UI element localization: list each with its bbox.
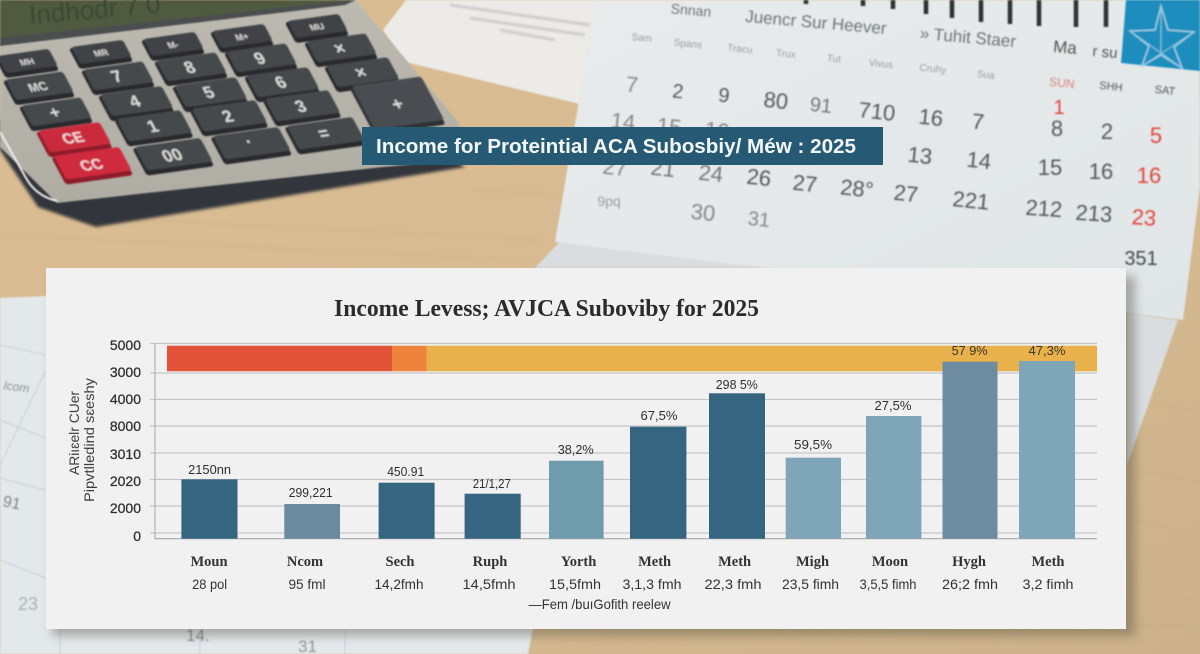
category sub-labels	[192, 576, 1074, 592]
calculator keys: 3	[291, 96, 310, 116]
calendar dates: 14	[610, 108, 637, 135]
category sub-labels: 3,1,3 fmh	[622, 576, 682, 592]
calendar weekday labels: Tut	[826, 53, 842, 66]
lower-left calendar sheet: 14.	[186, 626, 210, 645]
category labels: Sech	[386, 554, 414, 570]
calendar dates: 16	[1089, 159, 1113, 184]
calculator keys: M-	[165, 40, 181, 50]
bar value labels: 450.91	[387, 464, 424, 479]
calculator	[0, 0, 465, 227]
calculator keys: 00	[158, 145, 187, 166]
calendar header text: » Tuhit Staer	[919, 24, 1017, 51]
calendar dates: 2	[671, 80, 685, 104]
calendar dates: 7	[971, 108, 985, 135]
category labels: Meth	[1031, 554, 1065, 570]
calculator keys: MH	[18, 57, 37, 68]
y-axis labels: 2020	[110, 473, 141, 489]
bar value labels: 21/1,27	[473, 476, 511, 491]
category sub-labels: 14,5fmh	[462, 576, 516, 592]
y-axis labels: 8000	[110, 418, 141, 434]
calendar dates: 13	[906, 142, 933, 169]
calendar header text: Snnan	[670, 0, 712, 20]
calendar dates: 26	[745, 164, 772, 191]
calculator keys: 9	[250, 48, 269, 68]
calendar header text	[670, 0, 1118, 62]
calendar weekday labels	[631, 32, 1176, 98]
calendar dates: 16	[917, 104, 944, 131]
calendar header text: Juencr Sur Heever	[745, 7, 888, 38]
calendar weekday labels: SUN	[1049, 75, 1075, 91]
y-axis labels: 3000	[110, 364, 141, 380]
calculator keys: MU	[308, 22, 327, 33]
calculator keys: MR	[92, 48, 111, 59]
calculator keys: CE	[59, 129, 88, 148]
category labels: Ncom	[287, 554, 323, 570]
bars	[181, 361, 1075, 539]
calculator keys: ·	[241, 132, 256, 151]
calendar dates: 15	[656, 113, 683, 140]
calendar dates: 7	[625, 71, 639, 98]
bar value labels: 59,5%	[794, 437, 832, 452]
category labels: Yorth	[561, 554, 596, 570]
bar value labels: 299,221	[289, 485, 333, 500]
calendar	[555, 0, 1200, 320]
calendar dates: 23	[1131, 204, 1157, 231]
category labels: Moon	[872, 554, 908, 570]
calendar dates: 221	[951, 186, 991, 215]
category sub-labels: 26;2 fmh	[942, 576, 998, 592]
calendar weekday labels: Sua	[976, 69, 996, 82]
y-axis labels: 0	[133, 528, 141, 544]
category labels	[190, 554, 1065, 570]
calculator keys: 4	[125, 91, 144, 111]
calculator keys: =	[314, 123, 333, 143]
lower calendar sheet	[535, 236, 1178, 465]
calendar dates: 21	[649, 155, 676, 182]
calculator keys: CC	[77, 156, 107, 175]
calculator keys: M+	[233, 32, 251, 43]
calculator body	[0, 0, 464, 203]
panel drop shadow	[52, 276, 1135, 636]
calendar dates: 15	[1038, 155, 1062, 180]
calendar dates: 31	[747, 208, 771, 232]
calendar dates: 80	[762, 87, 789, 114]
calculator keys	[0, 14, 447, 185]
y-axis labels: 2000	[110, 500, 141, 516]
y-axis labels: 3010	[110, 446, 141, 462]
calendar dates: 5	[1150, 123, 1162, 148]
bar value labels: 38,2%	[558, 442, 594, 457]
category sub-labels: 28 pol	[192, 576, 227, 592]
category labels: Meth	[718, 554, 751, 570]
y-axis labels: 4000	[110, 391, 141, 407]
title banner	[362, 127, 883, 165]
calendar weekday labels: SAT	[1154, 84, 1176, 98]
category sub-labels: 23,5 fimh	[782, 576, 839, 592]
lower-left calendar sheet	[0, 296, 600, 654]
calendar header text: Ma	[1052, 37, 1078, 58]
calendar weekday labels: Trux	[776, 48, 796, 61]
calendar dates: 27	[791, 170, 818, 197]
category labels: Hygh	[952, 554, 986, 570]
category sub-labels: 95 fml	[288, 576, 326, 592]
category sub-labels: 3,5,5 fimh	[860, 576, 916, 592]
calendar weekday labels: Tracu	[727, 43, 753, 56]
calculator keys: ×	[351, 62, 370, 82]
calculator keys: MC	[25, 79, 51, 95]
calendar dates: 351	[1124, 248, 1158, 270]
category labels: Migh	[796, 554, 829, 570]
calendar weekday labels: Cruhy	[919, 63, 947, 76]
threshold colour band	[167, 346, 1097, 371]
chart panel	[46, 268, 1126, 629]
calculator keys: 1	[143, 116, 162, 136]
lower-left calendar sheet: Icom	[3, 378, 30, 396]
calculator base shadow	[0, 120, 465, 227]
calculator keys: ×	[330, 38, 349, 58]
calendar dates: 27	[892, 180, 919, 207]
gridlines	[150, 343, 1097, 539]
calendar dates: 16	[703, 117, 730, 144]
calendar dates: 9pq	[597, 193, 621, 209]
calendar weekday labels: Sam	[631, 32, 653, 45]
calculator display	[0, 0, 356, 46]
category sub-labels: 3,2 fimh	[1022, 576, 1074, 592]
calendar dates: 30	[690, 199, 717, 226]
bar value labels: 2150nn	[188, 462, 231, 477]
bar value labels: 67,5%	[640, 408, 678, 423]
bar value labels: 27,5%	[874, 398, 912, 413]
calendar dates: 24	[697, 160, 724, 187]
calendar dates: 91	[809, 94, 833, 118]
calendar dates: 8	[1051, 116, 1063, 141]
bar value labels: 47,3%	[1028, 343, 1066, 358]
calculator keys: 5	[199, 82, 218, 102]
category sub-labels: 14,2fmh	[374, 576, 424, 592]
title banner: Income for Proteintial ACA Subosbiy/ Méw : 2025	[376, 136, 856, 158]
y-axis title: Pipvtlledind sɛeshy	[81, 378, 97, 502]
calendar weekday labels: Vivus	[868, 58, 893, 71]
calendar dates	[597, 71, 1162, 270]
calendar dates: 2	[1101, 119, 1113, 144]
calculator keys: +	[45, 102, 64, 122]
calendar dates: 9	[717, 84, 731, 108]
calendar weekday labels: Spans	[673, 38, 703, 51]
y-axis title	[66, 378, 97, 502]
white paper behind calculator	[383, 0, 600, 104]
calendar dates: 710	[857, 97, 897, 126]
calendar header text: r su	[1092, 43, 1118, 62]
chart footnote: —Fem /buıGofith reelew	[529, 596, 671, 612]
y-axis labels	[110, 337, 141, 544]
calculator keys: 7	[107, 66, 126, 86]
category labels: Meth	[638, 554, 671, 570]
category sub-labels: 15,5fmh	[549, 576, 601, 592]
category labels: Ruph	[473, 554, 507, 570]
calculator keys: +	[387, 93, 408, 114]
lower-left calendar sheet: 91	[1, 493, 22, 514]
category sub-labels: 22,3 fmh	[704, 576, 762, 592]
calendar dates: 14	[965, 147, 992, 174]
calendar binding rings	[806, 0, 1106, 27]
calendar weekday labels: SHH	[1099, 80, 1123, 94]
calendar dates: 212	[1025, 195, 1063, 222]
calendar dates: 213	[1075, 200, 1113, 227]
bar value labels	[188, 343, 1066, 500]
calculator keys: 6	[271, 72, 290, 92]
bar value labels: 298 5%	[716, 377, 758, 392]
calendar dates: 1	[1053, 97, 1065, 119]
chart title: Income Levess; AVJCA Suboviby for 2025	[334, 296, 759, 322]
lower-left calendar sheet: 23	[18, 594, 38, 614]
bar value labels: 57 9%	[952, 343, 988, 358]
calendar dates: 27	[601, 154, 628, 181]
y-axis title: ARiıɛelr CUer	[66, 391, 82, 475]
calculator keys: 2	[218, 106, 237, 126]
category labels: Moun	[190, 554, 228, 570]
y-axis labels: 5000	[110, 337, 141, 353]
calendar corner badge with star	[1121, 0, 1200, 71]
calculator keys: 8	[180, 57, 199, 77]
calendar dates: 16	[1137, 163, 1161, 188]
calendar dates: 28°	[839, 174, 875, 203]
